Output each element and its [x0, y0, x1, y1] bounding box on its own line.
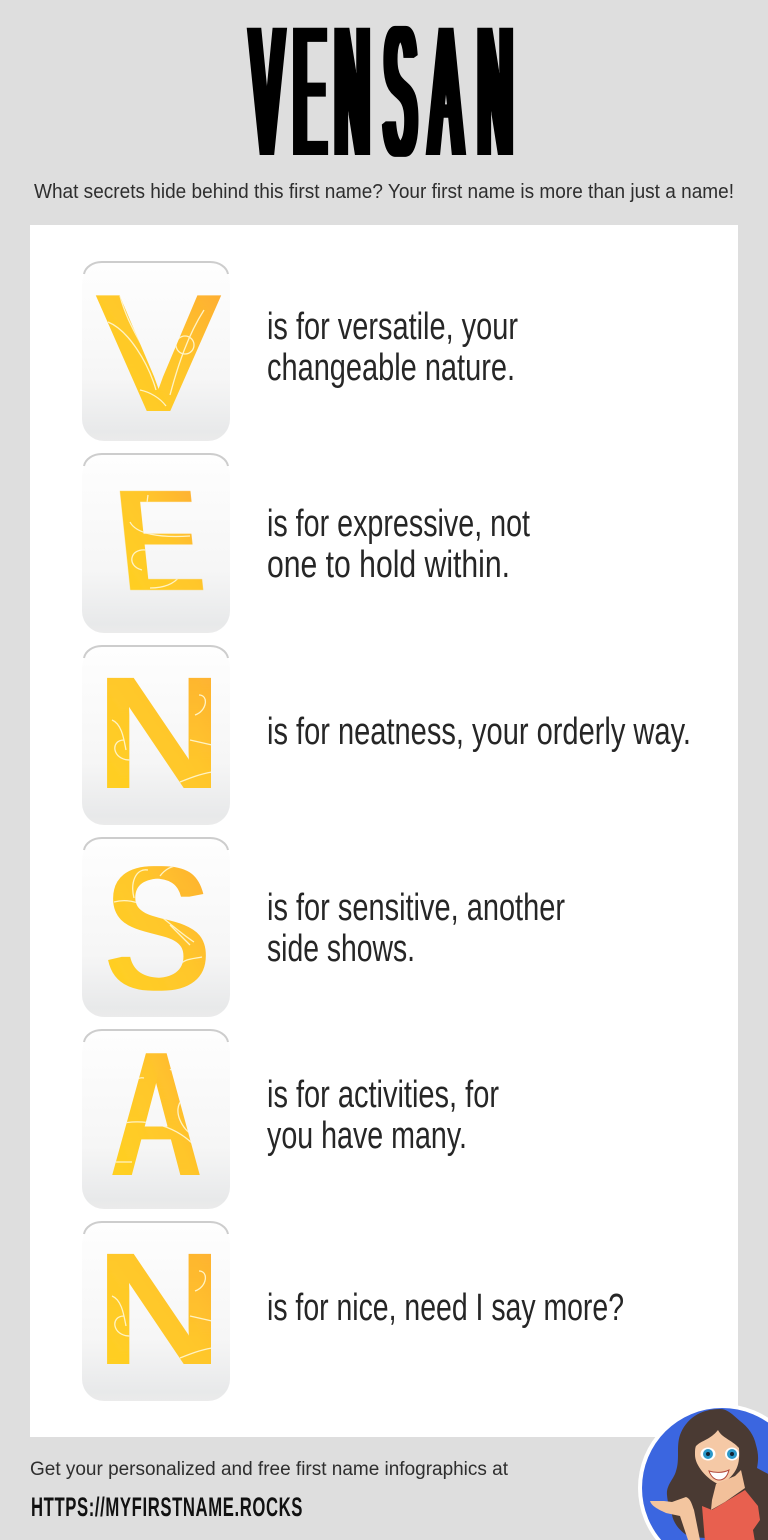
text: S meaning [267, 887, 565, 970]
icon: letter V tile: V [98, 259, 219, 447]
text: last N meaning: is for nice, need I say more? [267, 1287, 624, 1329]
text: A meaning: you have many. [267, 1115, 467, 1157]
icon: second letter N tile: N [97, 1219, 221, 1398]
row: letter N (last) [82, 1219, 624, 1401]
text: E meaning [267, 503, 530, 586]
text: A meaning [267, 1074, 499, 1157]
row: letter E [82, 454, 530, 633]
icon: letter A tile: A [116, 1015, 196, 1213]
subtitle: What secrets hide behind this first name? Your first name is more than just a name! [34, 181, 734, 203]
footer call to action: Get your personalized and free first name infographics at [30, 1459, 509, 1480]
row: letter A [82, 1015, 499, 1213]
text: A meaning: is for activities, for [267, 1074, 499, 1116]
icon: letter N tile: N [97, 643, 221, 822]
panel: letter meanings [30, 225, 738, 1437]
avatar: cartoon woman in circle [638, 1404, 768, 1540]
icon: letter S tile: S [105, 831, 209, 1027]
row: letter V [82, 259, 518, 447]
text: V meaning: is for versatile, your [267, 306, 518, 348]
text: V meaning: changeable nature. [267, 347, 515, 389]
icon: letter E tile [82, 454, 230, 633]
text: S meaning: is for sensitive, another [267, 887, 565, 929]
text: E meaning: is for expressive, not [267, 503, 530, 545]
row: letter S [82, 831, 565, 1027]
text: E meaning: one to hold within. [267, 544, 510, 586]
icon: letter E tile: E [111, 459, 208, 621]
footer url: HTTPS://MYFIRSTNAME.ROCKS [31, 1492, 303, 1522]
row: letter N [82, 643, 691, 825]
text: V meaning [267, 306, 518, 389]
text: S meaning: side shows. [267, 928, 415, 970]
